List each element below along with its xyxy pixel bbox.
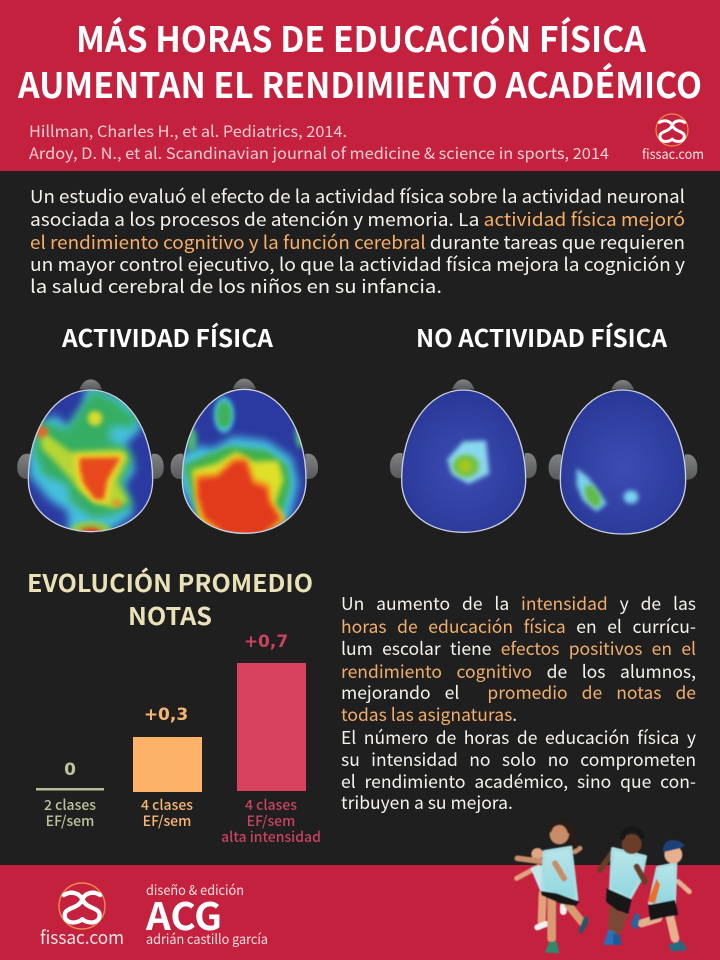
illustration: running children: [517, 823, 689, 953]
text block: explanation: Un aumento de la intensidad y de las: [341, 591, 696, 616]
panel: footer band: [0, 865, 720, 960]
brain map: activity left: [17, 379, 164, 540]
bar: 4 clases alta intensidad: +0,7: [244, 632, 288, 652]
child: middle: [600, 829, 645, 945]
bar: 2 clases: [36, 760, 104, 831]
logo: fissac footer: [40, 883, 124, 950]
credit: design: adrián castillo garcía: [146, 928, 268, 948]
bar: 4 clases alta intensidad: [221, 632, 321, 847]
credit: design: diseño & edición: [146, 879, 244, 899]
bar: 4 clases alta intensidad: EF/sem: [247, 811, 295, 831]
text block: explanation: [341, 591, 696, 815]
bar: 4 clases: 4 clases: [141, 795, 193, 815]
bar: 4 clases: +0,3: [144, 705, 188, 725]
child: girl: [517, 823, 589, 953]
text block: intro: asociada a los procesos de atención y memoria. La actividad física mejoró: [30, 206, 685, 232]
text block: explanation: todas las asignaturas.: [341, 702, 517, 727]
bar: 4 clases: EF/sem: [143, 811, 191, 831]
child: back: [517, 848, 563, 927]
citations: Ardoy, D. N., et al. Scandinavian journal of medicine & science in sports, 2014: [29, 142, 609, 164]
text block: intro: el rendimiento cognitivo y la función cerebral durante tareas que requieren: [30, 229, 685, 255]
heading: evolucion promedio notas: NOTAS: [128, 598, 212, 633]
text block: explanation: mejorando el promedio de notas de: [341, 680, 696, 705]
bar: 4 clases alta intensidad: 4 clases: [245, 795, 297, 815]
child: boy with cap: [631, 840, 689, 952]
bar: 4 clases: [133, 705, 202, 831]
text block: explanation: el rendimiento académico, sino que con-: [341, 769, 696, 794]
bar: 2 clases: EF/sem: [46, 811, 94, 831]
heading: evolucion promedio notas: EVOLUCIÓN PROMEDIO: [27, 565, 313, 600]
text block: explanation: rendimiento cognitivo de los alumnos,: [341, 659, 696, 684]
credit: design: [145, 879, 268, 948]
logo: fissac footer: fissac.com: [40, 924, 124, 950]
brain map: no activity left: [390, 379, 537, 537]
text block: intro: la salud cerebral de los niños en su infancia.: [30, 273, 442, 299]
text block: explanation: tribuyen a su mejora.: [341, 790, 513, 815]
logo: fissac header: fissac.com: [642, 143, 704, 163]
title: MÁS HORAS DE EDUCACIÓN FÍSICA: [76, 12, 647, 63]
bar: 2 clases: 2 clases: [44, 795, 96, 815]
brain map: activity right: [171, 379, 318, 540]
text block: intro: Un estudio evaluó el efecto de la actividad física sobre la actividad neuronal: [30, 183, 685, 209]
text block: explanation: horas de educación física en el currícu-: [341, 614, 696, 639]
heading: actividad fisica: ACTIVIDAD FÍSICA: [61, 320, 273, 355]
text block: explanation: El número de horas de educación física y: [341, 725, 696, 750]
text block: explanation: su intensidad no solo no comprometen: [341, 747, 696, 772]
text block: explanation: lum escolar tiene efectos positivos en el: [341, 636, 696, 661]
panel: chart section: [27, 565, 321, 847]
text block: intro: [30, 183, 686, 299]
text block: intro: un mayor control ejecutivo, lo que la actividad física mejora la cognición y: [30, 251, 686, 277]
panel: header band: [0, 0, 720, 171]
citations: Hillman, Charles H., et al. Pediatrics, 2014.: [29, 120, 347, 142]
bar: 2 clases: 0: [64, 760, 76, 780]
title: AUMENTAN EL RENDIMIENTO ACADÉMICO: [17, 58, 702, 109]
citations: [29, 120, 609, 164]
heading: no actividad fisica: NO ACTIVIDAD FÍSICA: [416, 320, 667, 355]
logo: fissac header: [642, 114, 704, 163]
bar: 4 clases alta intensidad: alta intensidad: [221, 827, 321, 847]
brain map: no activity right: [549, 380, 697, 537]
heading: evolucion promedio notas: [27, 565, 313, 633]
title: [17, 12, 702, 109]
credit: design: ACG: [145, 886, 222, 941]
